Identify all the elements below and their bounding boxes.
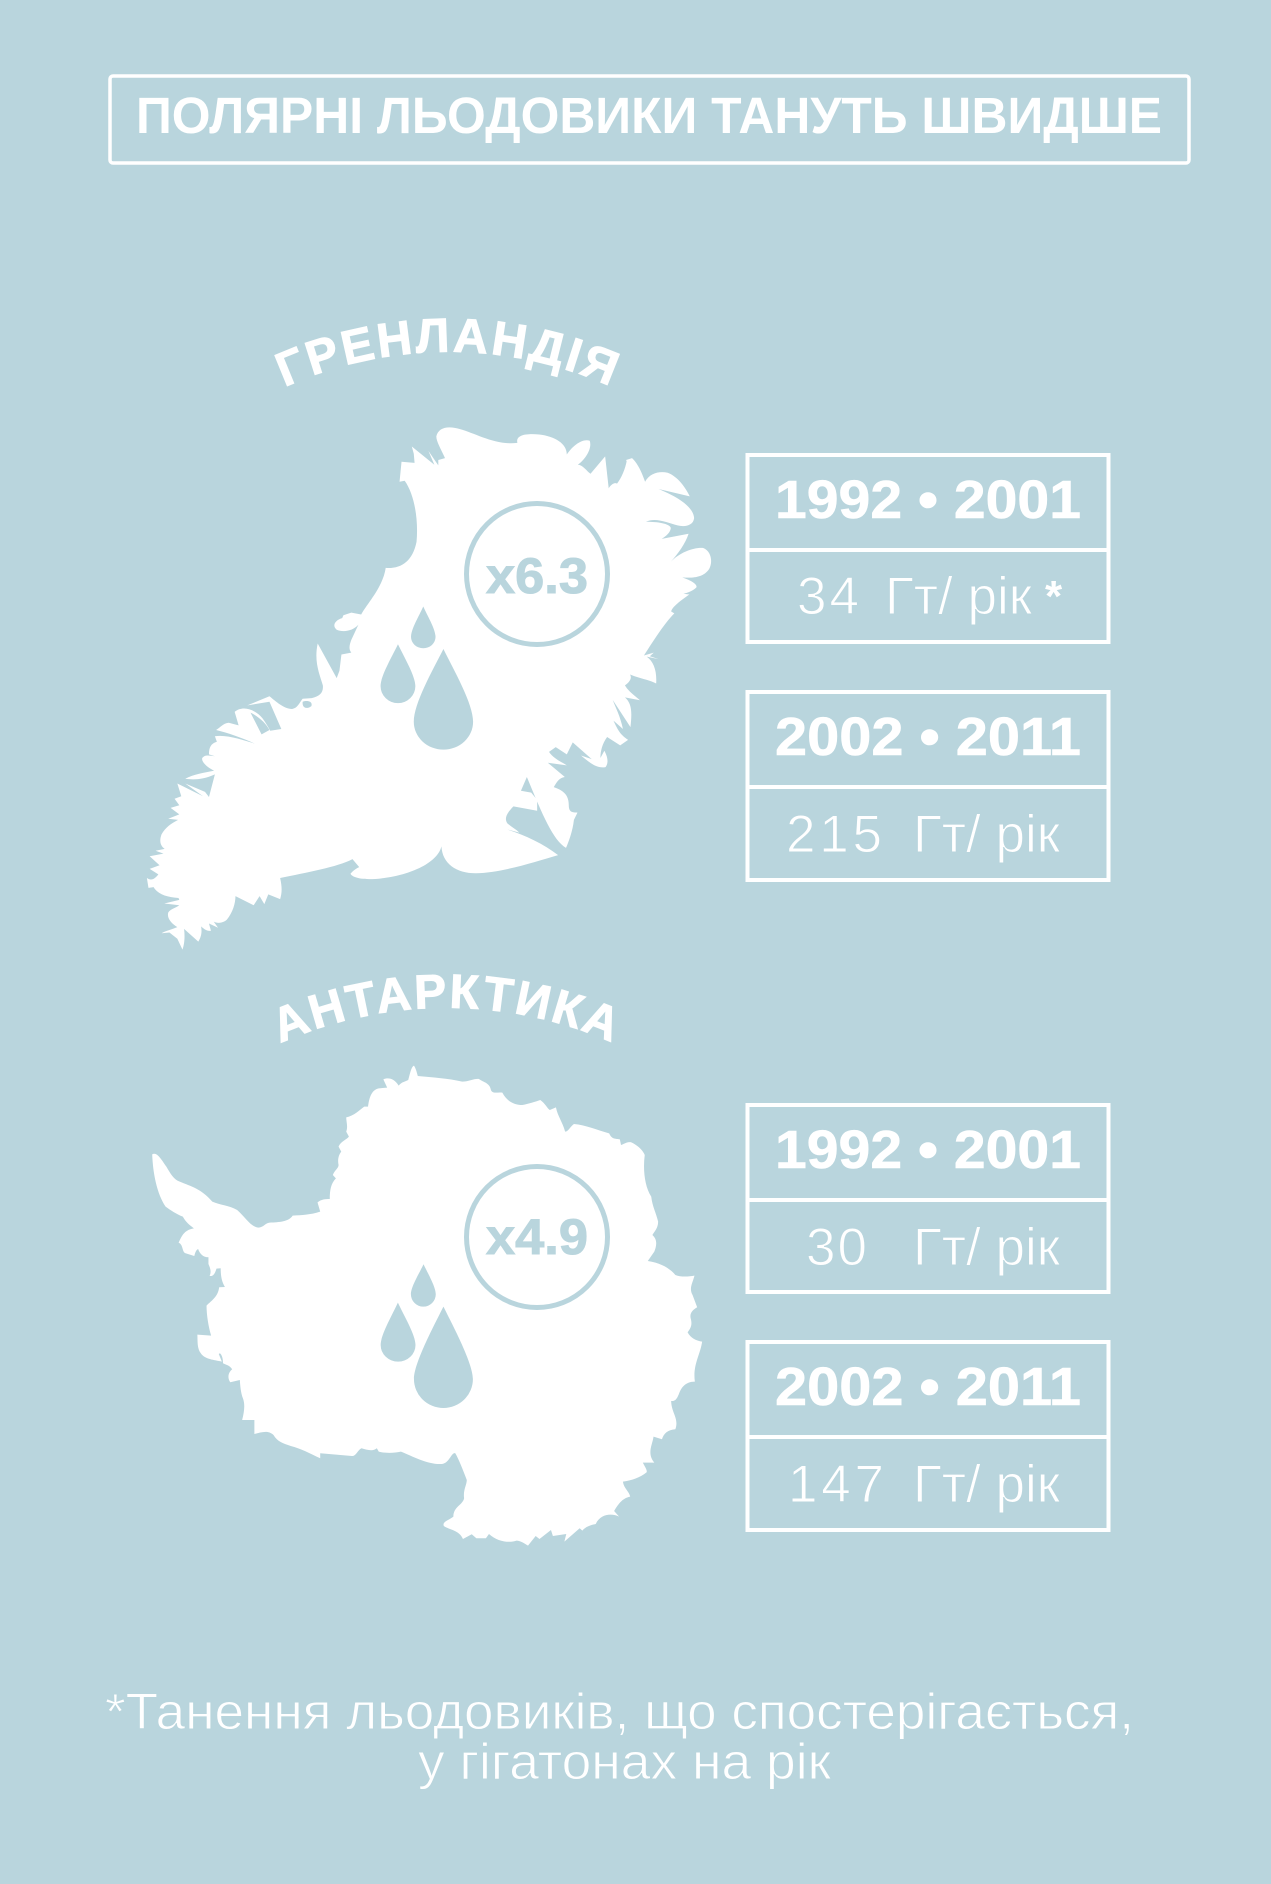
panel: Antarctica 1992-2001 [747,1105,1109,1292]
panel: Antarctica 1992-2001: 30 [806,1218,867,1277]
panel: Antarctica 2002-2011: 2002 • 2011 [775,1357,1081,1417]
panel: Antarctica 2002-2011: 147 [788,1455,884,1514]
panel: Greenland 1992-2001: * [1045,572,1063,621]
panel: Greenland 1992-2001: 34 [797,567,859,626]
multiplier badge x4.9: x4.9 [486,1209,588,1265]
meltwater drops [381,1264,473,1408]
heading: Antarctica: АНТАРКТИКА [280,974,612,1044]
multiplier badge x6.3: x6.3 [486,548,588,604]
panel: Antarctica 1992-2001: 1992 • 2001 [775,1120,1081,1180]
panel: Greenland 1992-2001 [747,455,1109,642]
panel: Greenland 1992-2001: 1992 • 2001 [775,470,1081,530]
title: ПОЛЯРНІ ЛЬОДОВИКИ ТАНУТЬ ШВИДШЕ [136,87,1162,144]
panel: Antarctica 1992-2001: Гт/ рік [913,1218,1061,1277]
map: Greenland [147,427,711,950]
heading: Greenland: ГРЕНЛАНДІЯ [274,318,620,386]
multiplier badge x6.3 [466,504,608,644]
panel: Greenland 2002-2011: 215 [786,805,882,864]
multiplier badge x4.9 [466,1166,608,1308]
panel: Greenland 1992-2001: Гт/ рік [885,567,1033,626]
Greenland silhouette [147,427,711,950]
map: Antarctica [152,1066,702,1546]
footnote: у гігатонах на рік [418,1733,832,1790]
footnote [105,1683,1134,1790]
footnote: *Танення льодовиків, що спостерігається, [105,1683,1134,1740]
panel: Antarctica 2002-2011: Гт/ рік [913,1455,1061,1514]
panel: Greenland 2002-2011: Гт/ рік [913,805,1061,864]
panel: Antarctica 2002-2011 [747,1342,1109,1530]
title [110,76,1189,163]
meltwater drops [381,606,473,750]
panel: Greenland 2002-2011: 2002 • 2011 [775,707,1081,767]
panel: Greenland 2002-2011 [747,692,1109,880]
Antarctica silhouette [152,1066,702,1546]
